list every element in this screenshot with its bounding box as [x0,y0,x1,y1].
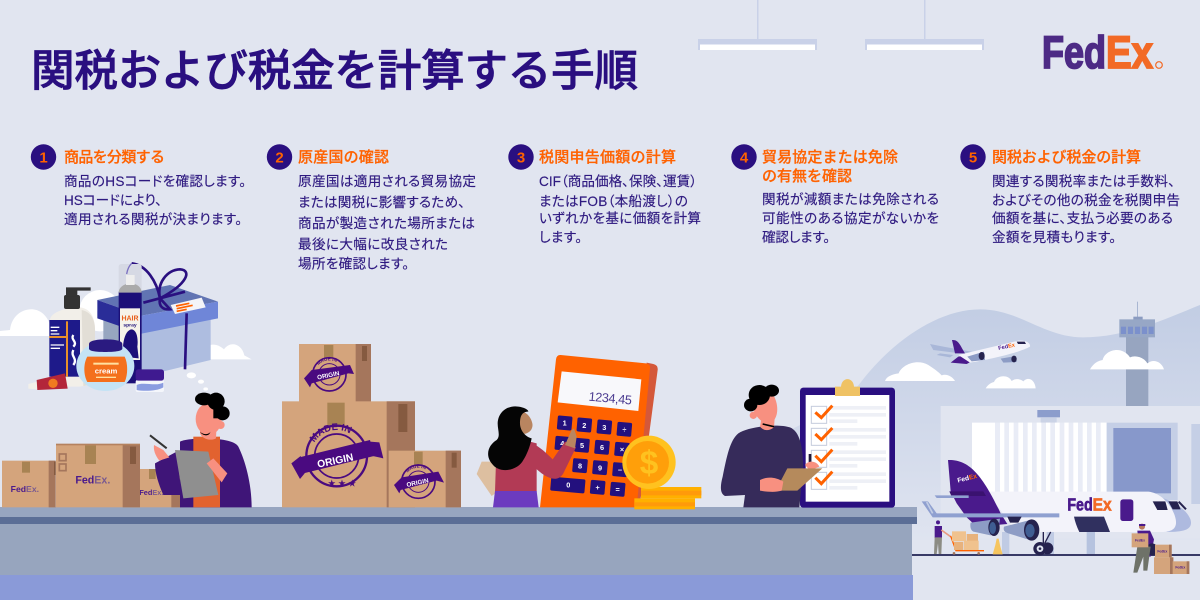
man hair [744,385,779,411]
large box: ★ ★ ★ [328,479,356,488]
counter [0,507,917,600]
large box [282,401,415,508]
calculator keys: × [620,445,624,454]
heading 4 [762,148,898,185]
badge 2 [267,144,292,170]
body 3: します。 [539,230,582,245]
calculator [540,355,658,507]
man with clipboard [721,385,822,507]
small tube [28,373,68,390]
heading 4: の有無を確認 [762,168,852,185]
FedEx boxes: FedEx. [75,475,110,487]
cargo plane: FedEx [957,473,978,485]
large box: MADE IN [309,423,352,442]
top box [299,344,371,402]
body 2: 商品が製造された場所または [298,216,475,231]
calculator keys: 3 [602,423,606,432]
stacked boxes: FedEx [1157,550,1167,554]
body 4: 可能性のある協定がないかを [762,211,939,226]
clouds [885,350,1164,388]
airport scene [793,302,1200,574]
FedEx boxes: FedEx. [11,484,39,494]
traffic cone [993,539,1003,554]
checklist and man [721,379,895,508]
badge 4: 4 [740,150,749,166]
check marks [815,406,832,484]
badge 4 [731,144,757,170]
badge 1 [31,144,56,170]
products and person thinking [0,263,252,507]
badge 3 [508,144,534,170]
badge 5 [960,144,986,170]
clipboard [800,379,895,508]
title: 関税および税金を計算する手順 [31,48,638,96]
body 3: いずれかを基に価額を計算 [539,210,701,226]
small plane in the sky [930,340,1030,364]
cargo plane [922,460,1191,555]
ground worker with cart [934,520,984,555]
body 4: 関税が減額または免除される [762,191,939,207]
heading 4: 貿易協定または免除 [762,148,898,166]
calculator keys: + [596,483,600,492]
FedEx logo: Fed [1042,27,1106,78]
body 2: 原産国は適用される貿易協定 [298,174,476,189]
calculator: 1234,45 [588,390,632,407]
step 2 [267,144,476,272]
body 2 [298,174,476,272]
gold coins: $ [640,445,659,482]
origin boxes and calculator scene [282,344,702,510]
calculator keys: 0 [566,480,570,489]
hair spray [119,263,142,383]
body 4: 確認します。 [762,230,830,245]
pump bottle [49,287,95,387]
body 5: 金額を見積もります。 [992,230,1116,245]
calculator keys: ÷ [622,425,626,434]
gold coins [622,436,701,509]
step 3 [508,144,701,245]
body 5 [992,174,1180,245]
heading 1: 商品を分類する [64,149,165,166]
calculator keys: 6 [600,443,604,452]
hangar building [941,406,1200,555]
right box: MADE IN [406,464,426,472]
badge 2: 2 [275,150,284,166]
body 3: またはFOB（本船渡し）の [539,194,688,209]
worker with box [1132,524,1158,573]
heading 3: 税関申告価額の計算 [539,148,676,166]
right box [388,450,461,508]
calculator keys: 9 [598,463,602,472]
thought bubbles [187,372,208,391]
hair spray: HAIR [121,316,139,323]
body 5: およびその他の税金を税関申告 [992,193,1180,208]
small plane in the sky: FedEx [998,342,1017,352]
FedEx boxes [2,444,181,507]
control tower [1119,302,1155,407]
ground line [912,554,1200,556]
body 5: 関連する関税率または手数料、 [992,174,1175,189]
small jar [136,369,164,392]
FedEx logo [1042,27,1162,78]
large box: ORIGIN [316,452,355,471]
hair spray: spray [123,323,137,329]
step 1 [31,144,246,227]
gift box [97,263,218,377]
body 2: 場所を確認します。 [298,256,409,272]
cargo plane: Fed [1067,495,1093,515]
person with tablet [150,393,252,507]
FedEx boxes: FedEx. [139,488,163,497]
background hill [793,305,1200,540]
calculator keys: 8 [578,461,582,470]
stacked boxes: FedEx [1175,566,1185,570]
body 5: 価額を基に、支払う必要のある [992,210,1173,226]
body 1: 適用される関税が決まります。 [64,212,242,227]
top box: ORIGIN [317,370,340,382]
badge 5: 5 [969,150,977,166]
calculator keys: 4 [560,439,565,448]
calculator keys: 5 [580,441,584,450]
body 1: 商品のHSコードを確認します。 [64,174,246,189]
cream jar: cream [95,366,117,375]
badge 3: 3 [517,150,525,166]
top box: MADE IN [316,358,338,365]
calculator keys: 1 [563,419,567,428]
ceiling lamps [698,0,984,50]
cream jar [76,339,134,391]
checklist rows [829,406,886,490]
cargo plane: Ex [1093,495,1112,515]
step 5 [960,144,1180,245]
hair [195,393,230,420]
heading 5: 関税および税金の計算 [992,148,1141,166]
calculator keys: 2 [582,421,586,430]
clouds behind products [0,290,252,359]
body 3: CIF（商品価格、保険、運賃） [539,174,697,189]
heading 2: 原産国の確認 [298,149,389,166]
stacked boxes [1154,545,1189,574]
step 4 [731,144,939,245]
origin box stack [282,344,461,508]
body 3 [539,174,701,245]
woman at calculator [477,406,577,507]
body 2: または関税に影響するため、 [298,195,465,210]
body 2: 最後に大幅に改良された [298,237,448,252]
body 1 [64,174,246,227]
body 4 [762,191,939,245]
worker with box: FedEx [1135,538,1145,542]
FedEx logo: Ex [1106,27,1153,78]
body 1: HSコードにより、 [64,193,162,208]
calculator keys [550,415,632,497]
calculator keys: = [616,485,620,494]
right box: ORIGIN [406,477,430,489]
badge 1: 1 [39,150,48,166]
calculator keys: − [618,465,622,474]
